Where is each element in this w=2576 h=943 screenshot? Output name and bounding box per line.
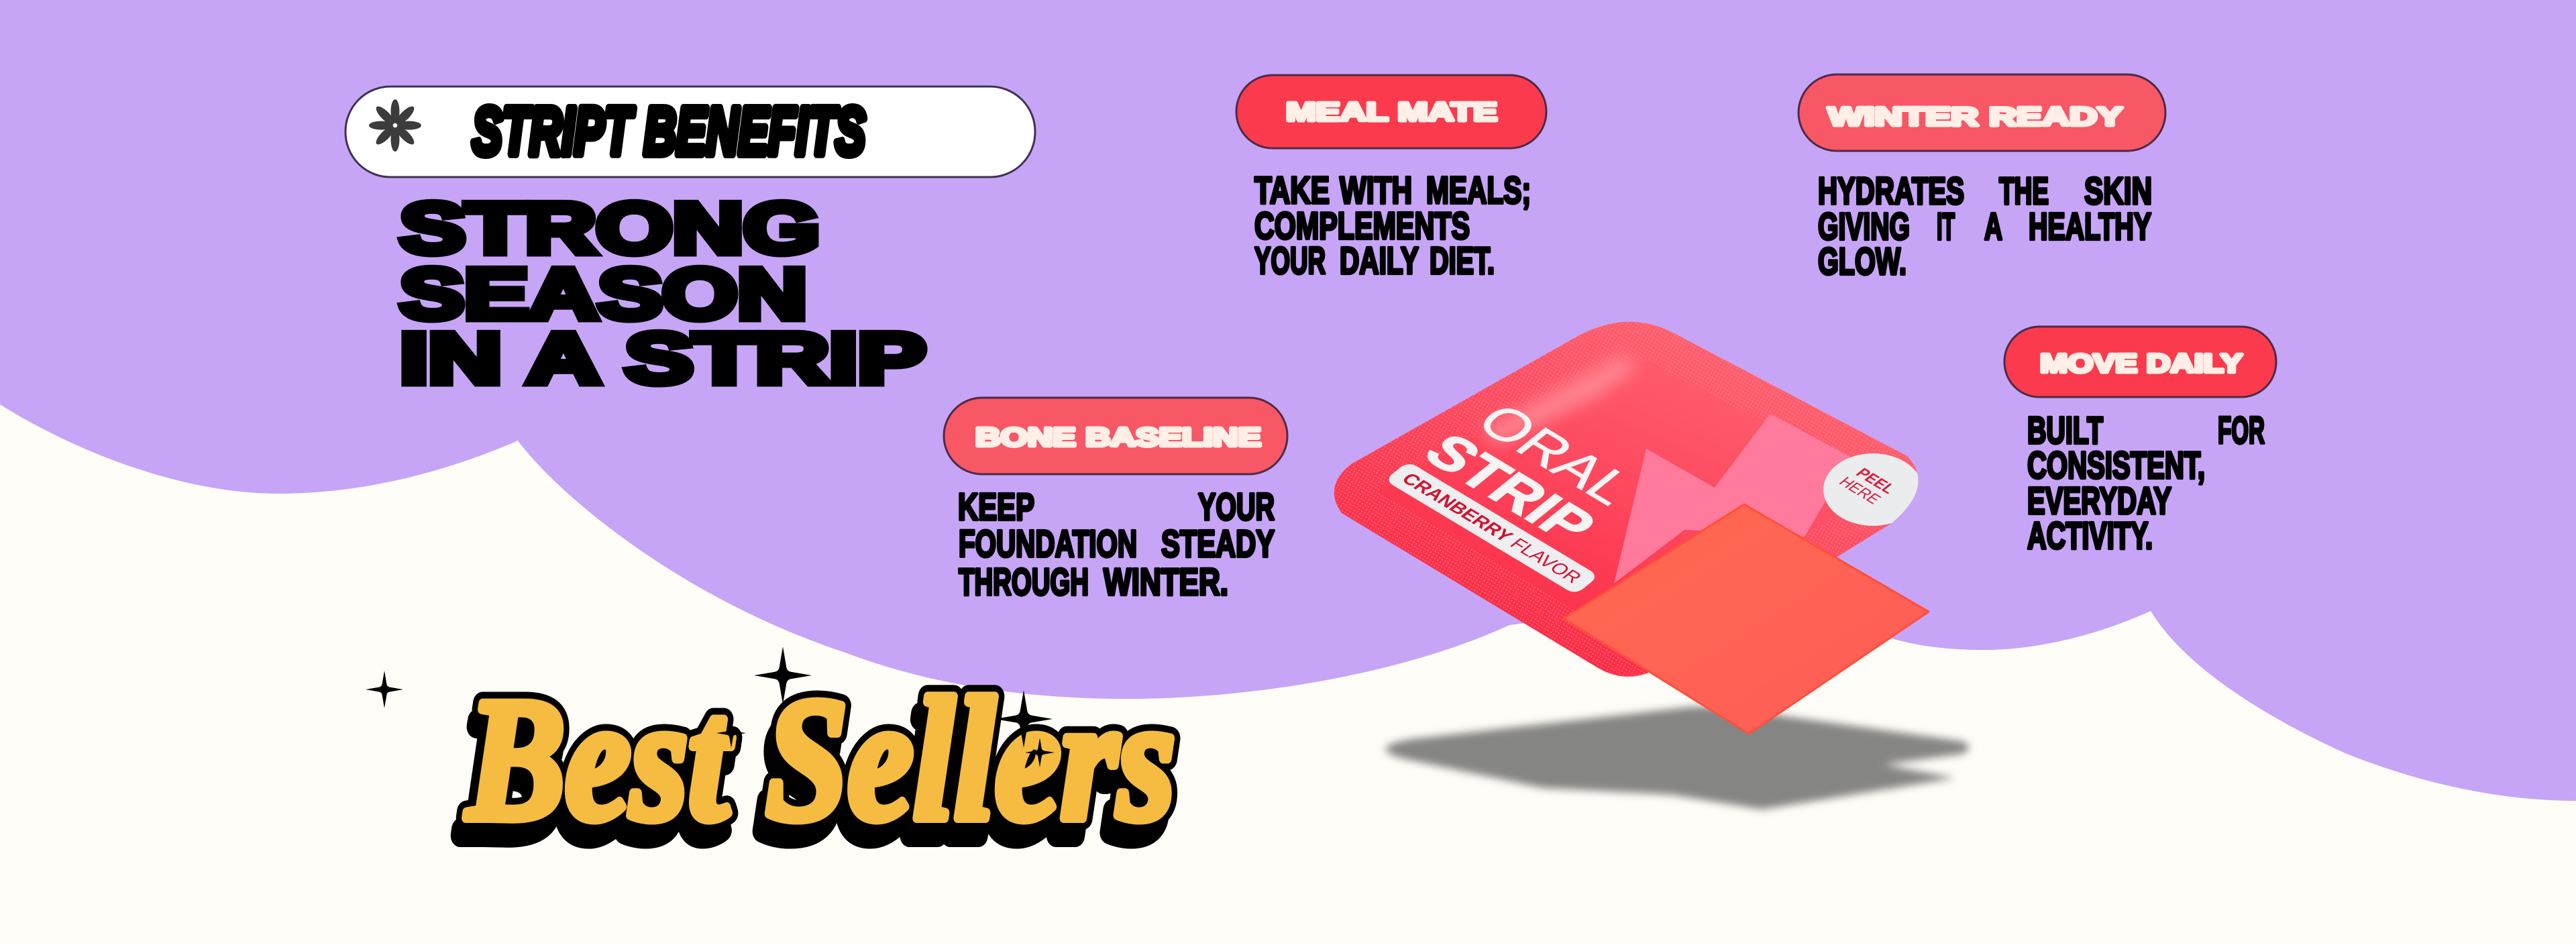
label: strip: STRIP (1411, 424, 1609, 553)
product: red oral strip film (1564, 504, 1929, 734)
callout: winter ready: WINTER READY (1828, 103, 2123, 131)
shadow under product (1385, 707, 1969, 810)
sticker: peel here: PEEL (1851, 465, 1899, 497)
callout: winter ready (1799, 74, 2165, 283)
product: oral strip pouch (1334, 322, 1923, 677)
text: winter ready description: GLOW. (1818, 240, 1907, 283)
sticker: peel here: HERE (1835, 474, 1884, 507)
text: meal mate description: YOUR (1254, 239, 1326, 282)
callout: bone baseline: BONE BASELINE (975, 423, 1261, 452)
text: meal mate description: COMPLEMENTS (1254, 205, 1470, 247)
icon: flower asterisk (369, 99, 421, 152)
text: meal mate description: TAKE (1254, 169, 1330, 212)
text: winter ready description (1818, 170, 2152, 283)
callout: bone baseline (944, 398, 1287, 604)
text: move daily description (2027, 409, 2265, 557)
text: winter ready description: SKIN (2084, 170, 2152, 213)
text: bone baseline description: THROUGH (959, 561, 1089, 604)
logo: best sellers lettering: Best Sellers (465, 662, 1175, 856)
heading: strong season in a strip: IN A STRIP (400, 318, 926, 398)
text: move daily description: ACTIVITY. (2027, 514, 2153, 557)
logo: best sellers lettering: Best Sellers (465, 662, 1175, 856)
sticker: peel here (1823, 453, 1923, 526)
callout: meal mate (1236, 75, 1546, 282)
text: move daily description: CONSISTENT, (2027, 444, 2205, 487)
text: bone baseline description: STEADY (1161, 522, 1275, 565)
text: meal mate description: WITH (1340, 169, 1412, 212)
heading: strong season in a strip (400, 188, 926, 398)
label: oral: ORAL (1465, 394, 1648, 514)
text: meal mate description: MEALS; (1426, 169, 1531, 212)
text: winter ready description: THE (1999, 170, 2049, 213)
label: strip benefits: STRIPT BENEFITS (472, 94, 865, 169)
text: move daily description: FOR (2218, 409, 2265, 452)
callout: meal mate: MEAL MATE (1286, 98, 1497, 127)
text: winter ready description: IT (1937, 205, 1955, 248)
text: bone baseline description: FOUNDATION (959, 522, 1137, 565)
callout: move daily (2004, 327, 2276, 557)
text: move daily description: BUILT (2027, 409, 2103, 452)
callout: move daily: MOVE DAILY (2040, 349, 2243, 378)
text: winter ready description: HEALTHY (2029, 205, 2151, 248)
text: meal mate description: DAILY (1340, 239, 1419, 282)
text: winter ready description: GIVING (1818, 205, 1910, 248)
graphic: pink lightning bolt (1614, 414, 1851, 584)
header pill: strip benefits (345, 87, 1035, 177)
text: meal mate description: DIET. (1430, 239, 1495, 282)
text: bone baseline description: KEEP (958, 486, 1034, 529)
text: meal mate description (1254, 169, 1531, 282)
text: bone baseline description: YOUR (1198, 486, 1275, 529)
text: move daily description: EVERYDAY (2027, 480, 2171, 522)
text: bone baseline description: WINTER. (1104, 561, 1228, 604)
text: winter ready description: A (1984, 205, 2002, 248)
heading: strong season in a strip: SEASON (400, 254, 807, 334)
heading: strong season in a strip: STRONG (400, 188, 820, 268)
icons: sparkles (366, 647, 1055, 767)
label: cranberry flavor: CRANBERRY FLAVOR (1397, 469, 1586, 586)
text: winter ready description: HYDRATES (1818, 170, 1964, 213)
text: bone baseline description (958, 486, 1275, 604)
logo: best sellers lettering: Best Sellers (460, 679, 1167, 874)
